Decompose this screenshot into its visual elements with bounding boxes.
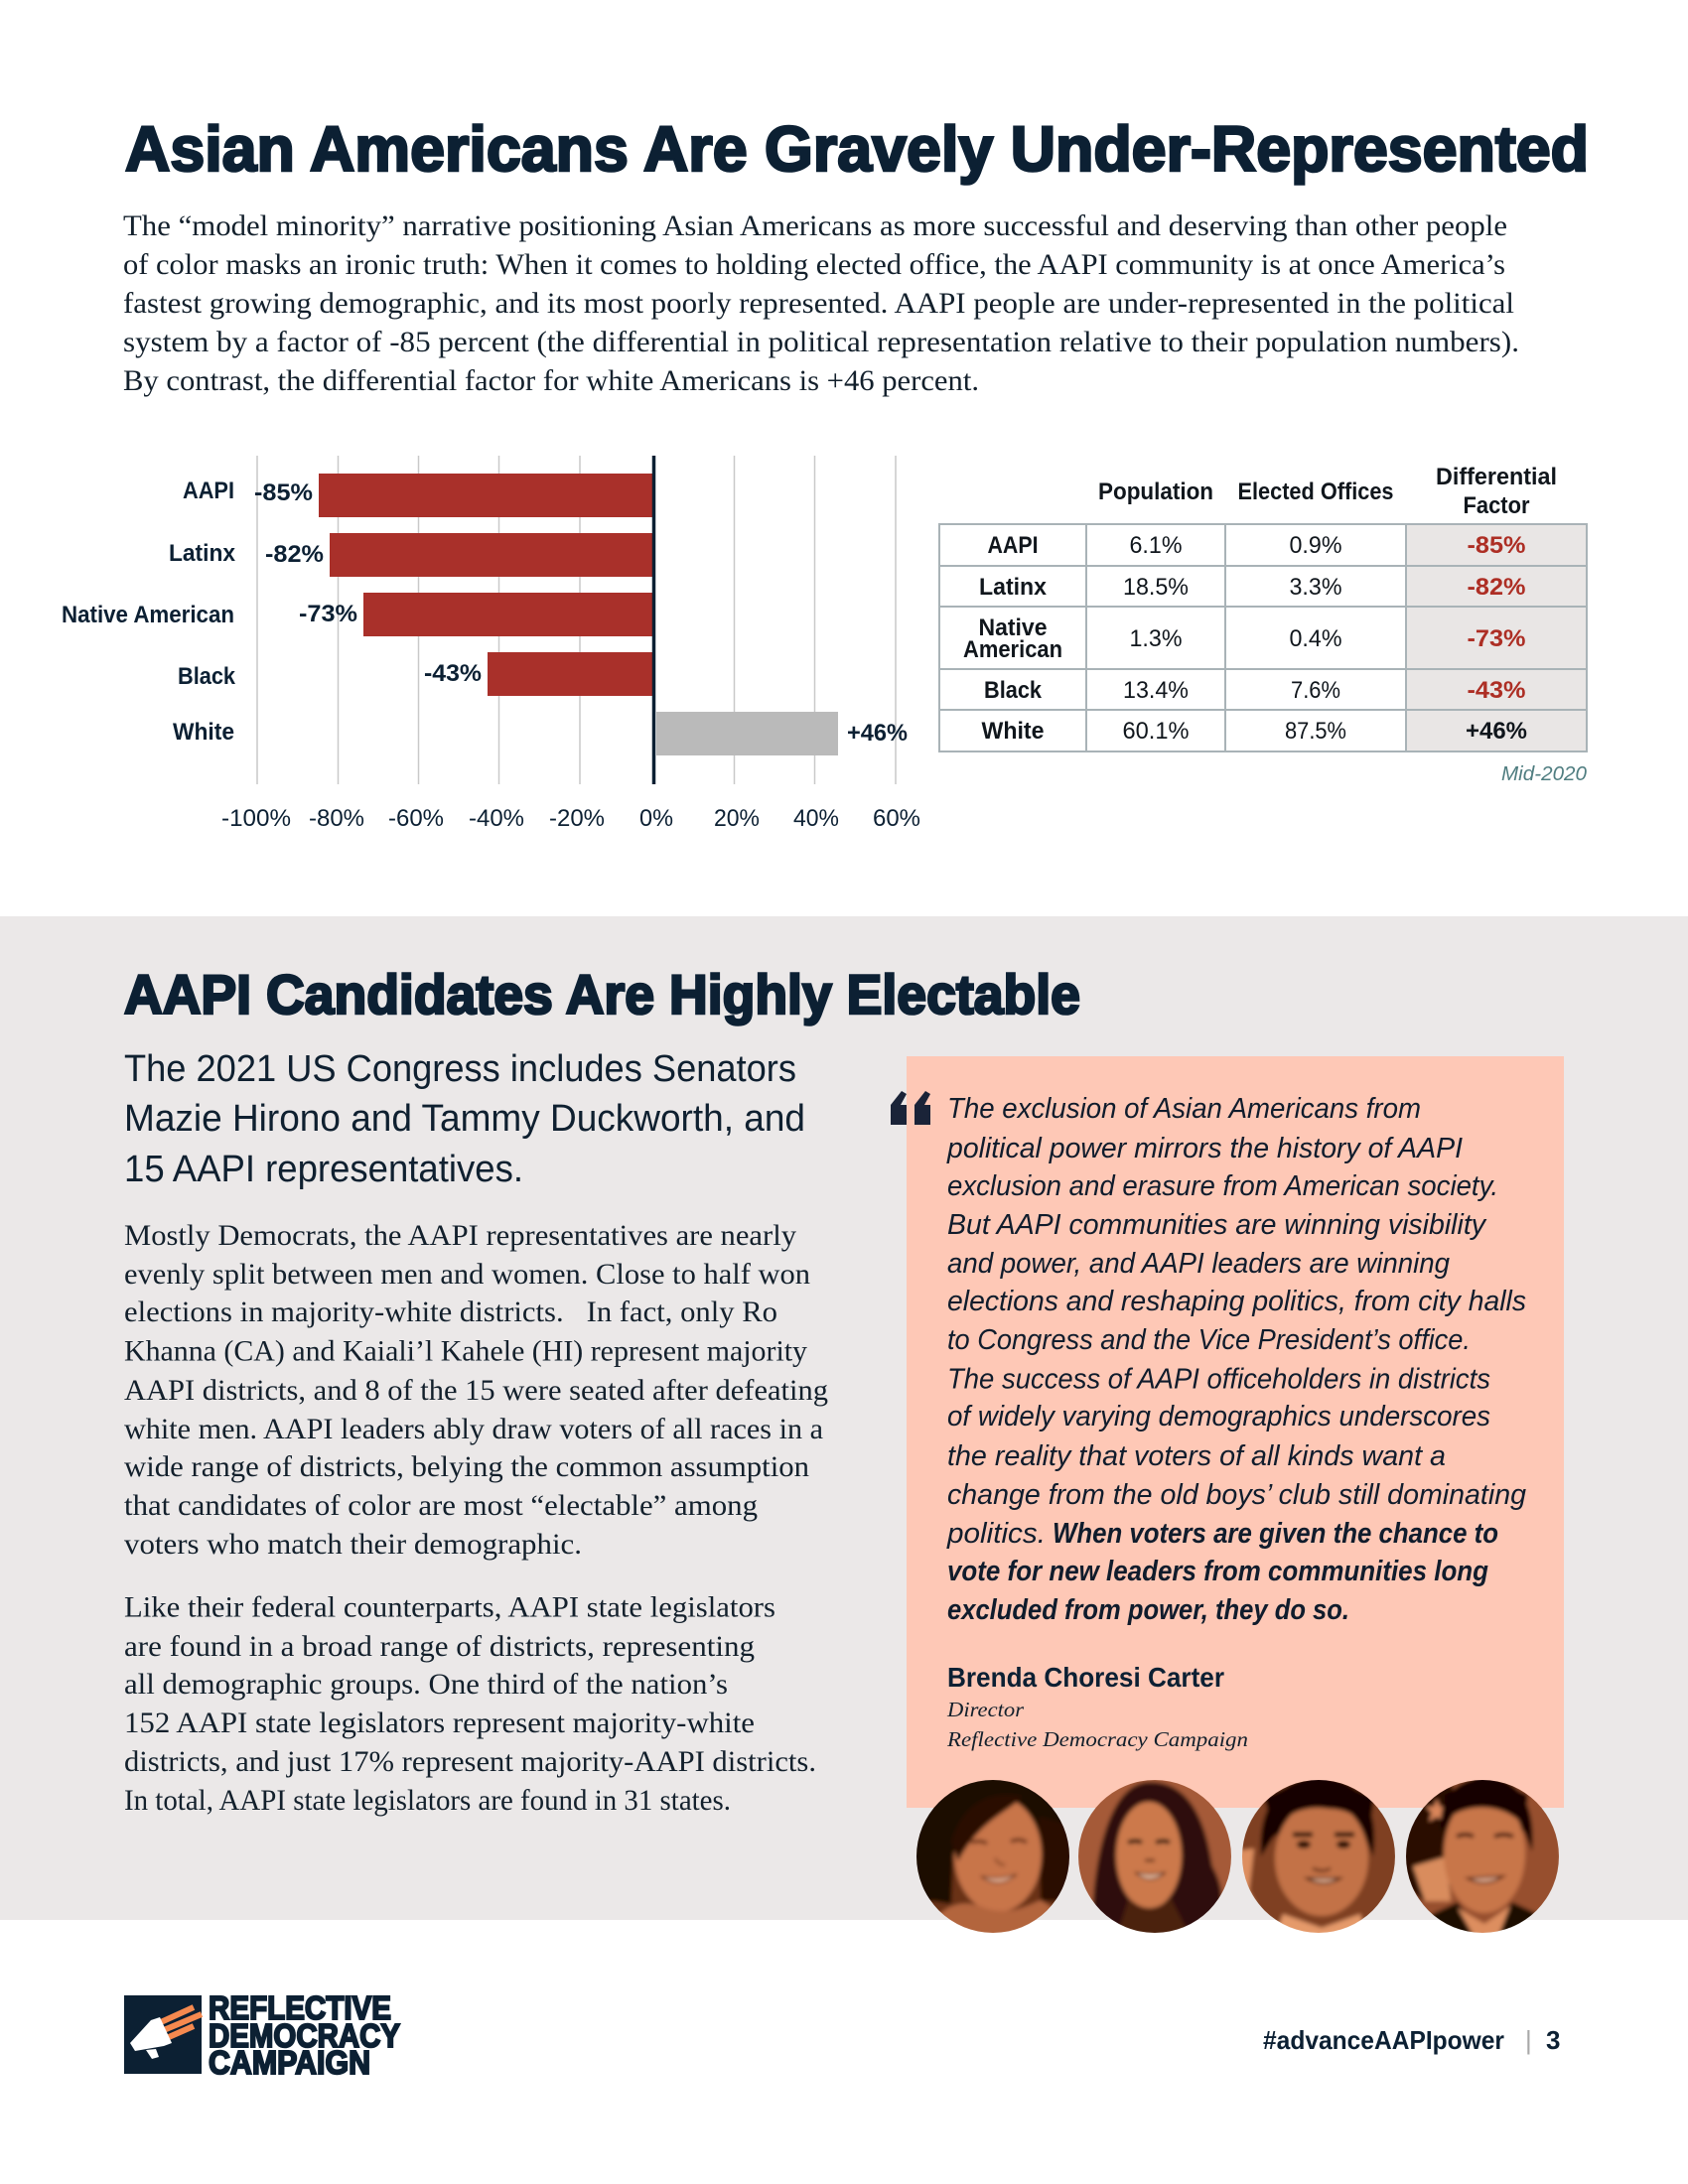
quote text: of widely varying demographics underscores	[947, 1401, 1490, 1433]
data table: 7.6%	[1291, 677, 1340, 704]
quote text: But AAPI communities are winning visibility	[947, 1209, 1486, 1241]
data table: Differential	[1436, 464, 1557, 490]
quote text: political power mirrors the history of AAPI	[946, 1133, 1463, 1164]
data table: American	[963, 636, 1062, 663]
data table: -85%	[1468, 532, 1525, 559]
portrait: Tammy Duckworth	[1078, 1780, 1231, 1933]
table date note: Mid-2020	[1501, 763, 1587, 785]
bar chart: representation differential: -100%	[221, 805, 291, 832]
data table: Factor	[1464, 492, 1529, 519]
body text: representatives: evenly split between men and women. Close to half won	[124, 1258, 810, 1291]
data table: 18.5%	[1123, 574, 1189, 601]
body text: representatives: wide range of districts, belying the common assumption	[124, 1450, 809, 1483]
body text: representatives: Mostly Democrats, the AAPI representatives are nearly	[124, 1219, 796, 1252]
body text: state legislators	[124, 1590, 816, 1817]
data table: -82%	[1468, 574, 1525, 601]
bar chart: representation differential: 60%	[873, 805, 920, 832]
body text: representatives: white men. AAPI leaders ably draw voters of all races in a	[124, 1413, 823, 1445]
bar chart: representation differential: -85%	[254, 479, 313, 506]
portrait: Mazie Hirono	[916, 1780, 1069, 1933]
quote text: exclusion and erasure from American society.	[947, 1170, 1498, 1202]
footer hashtag and page number: |	[1525, 2025, 1532, 2055]
icon: megaphone	[124, 1995, 202, 2074]
quote text	[946, 1093, 1526, 1626]
data table: 0.9%	[1289, 532, 1342, 559]
intro text block: By contrast, the differential factor for white Americans is +46 percent.	[123, 364, 979, 397]
body text: state legislators: districts, and just 17% represent majority-AAPI districts.	[124, 1745, 816, 1778]
bar chart: representation differential: Black	[178, 663, 236, 690]
logo: Reflective Democracy Campaign	[124, 1989, 400, 2081]
bar chart: representation differential: White	[173, 719, 234, 746]
subheading: The 2021 US Congress includes Senators	[124, 1048, 796, 1090]
subheading: Mazie Hirono and Tammy Duckworth, and	[124, 1098, 805, 1140]
data table: -43%	[1468, 677, 1525, 704]
intro text block	[123, 209, 1519, 397]
quote text: vote for new leaders from communities long	[947, 1556, 1488, 1587]
data table: 0.4%	[1289, 625, 1342, 652]
data table: 87.5%	[1285, 718, 1346, 745]
footer hashtag and page number: #advanceAAPIpower	[1263, 2025, 1504, 2055]
subheading: 15 AAPI representatives.	[124, 1149, 523, 1190]
bar chart: representation differential: -82%	[265, 541, 324, 568]
intro text block: system by a factor of -85 percent (the differential in political representation relative to their population numbers).	[123, 326, 1519, 358]
quote text: politics.	[946, 1518, 1046, 1550]
body text: state legislators: 152 AAPI state legislators represent majority-white	[124, 1706, 755, 1739]
panel: pull quote	[891, 1056, 1564, 1808]
quote text: elections and reshaping politics, from city halls	[947, 1286, 1526, 1317]
data table: Elected Offices	[1237, 478, 1394, 505]
bar chart: representation differential: 0%	[639, 805, 673, 832]
data table: Black	[984, 677, 1043, 704]
body text: state legislators: Like their federal counterparts, AAPI state legislators	[124, 1590, 775, 1624]
data table: +46%	[1466, 718, 1527, 745]
attribution: Reflective Democracy Campaign	[946, 1727, 1248, 1751]
data table: 60.1%	[1122, 718, 1190, 745]
data table: 6.1%	[1130, 532, 1182, 559]
bar chart: representation differential	[62, 456, 920, 832]
attribution: Brenda Choresi Carter	[947, 1662, 1224, 1693]
bar chart: representation differential: -60%	[388, 805, 444, 832]
logo: Reflective Democracy Campaign: DEMOCRACY	[209, 2017, 400, 2054]
data table: Native	[979, 614, 1047, 641]
footer hashtag and page number: 3	[1546, 2025, 1560, 2055]
quote text: and power, and AAPI leaders are winning	[947, 1248, 1450, 1280]
bar chart: representation differential: -20%	[549, 805, 605, 832]
bar chart: representation differential: -43%	[424, 660, 482, 687]
data table: 1.3%	[1130, 625, 1182, 652]
body text: representatives: that candidates of color are most “electable” among	[124, 1489, 758, 1522]
quote text: When voters are given the chance to	[1053, 1518, 1498, 1550]
bar chart: representation differential: -40%	[469, 805, 524, 832]
bar chart: representation differential: Native American	[62, 602, 234, 628]
data table	[939, 464, 1587, 751]
bar chart: representation differential: -80%	[309, 805, 364, 832]
bar chart: representation differential: -73%	[299, 601, 357, 627]
data table: 3.3%	[1289, 574, 1342, 601]
quote text: change from the old boys’ club still dominating	[947, 1479, 1526, 1511]
data table: 13.4%	[1123, 677, 1189, 704]
data table: AAPI	[987, 532, 1039, 559]
body text: state legislators: are found in a broad range of districts, representing	[124, 1630, 755, 1663]
bar chart: representation differential: AAPI	[183, 478, 234, 504]
portrait: Ro Khanna	[1242, 1780, 1395, 1933]
body text: representatives: elections in majority-white districts. In fact, only Ro	[124, 1296, 777, 1328]
quote text: The exclusion of Asian Americans from	[947, 1093, 1421, 1125]
quote text: the reality that voters of all kinds want a	[947, 1440, 1446, 1472]
section heading: AAPI Candidates Are Highly Electable	[124, 963, 1080, 1025]
quote text: excluded from power, they do so.	[947, 1594, 1349, 1626]
data table: Population	[1098, 478, 1213, 505]
body text: state legislators: In total, AAPI state legislators are found in 31 states.	[124, 1784, 731, 1817]
title: Asian Americans Are Gravely Under-Represented	[125, 113, 1589, 185]
quote text: to Congress and the Vice President’s office.	[947, 1324, 1471, 1356]
intro text block: fastest growing demographic, and its most poorly represented. AAPI people are under-represented in the political	[123, 287, 1514, 320]
logo: Reflective Democracy Campaign: CAMPAIGN	[209, 2044, 370, 2081]
intro text block: The “model minority” narrative positioning Asian Americans as more successful and deserving than other people	[123, 209, 1507, 242]
bar chart: representation differential: Latinx	[169, 540, 236, 567]
bar chart: representation differential: 20%	[714, 805, 760, 832]
portrait: Kaiali'i Kahele	[1406, 1780, 1559, 1933]
subheading	[124, 1048, 805, 1190]
body text: representatives: Khanna (CA) and Kaiali’l Kahele (HI) represent majority	[124, 1334, 807, 1368]
quote text: The success of AAPI officeholders in districts	[947, 1364, 1490, 1396]
data table: White	[981, 718, 1045, 745]
intro text block: of color masks an ironic truth: When it comes to holding elected office, the AAPI community is at once America’s	[123, 248, 1505, 281]
body text: representatives: AAPI districts, and 8 of the 15 were seated after defeating	[124, 1374, 828, 1407]
data table: Latinx	[979, 574, 1048, 601]
body text: representatives: voters who match their demographic.	[124, 1528, 582, 1561]
attribution	[946, 1662, 1248, 1751]
bar chart: representation differential: +46%	[847, 720, 908, 747]
logo: Reflective Democracy Campaign: REFLECTIVE	[209, 1989, 391, 2026]
body text: representatives	[124, 1219, 828, 1561]
panel: electable section background	[0, 916, 1688, 1920]
bar chart: representation differential: 40%	[793, 805, 839, 832]
data table: -73%	[1468, 625, 1525, 652]
attribution: Director	[946, 1698, 1025, 1721]
icon: quotation marks	[891, 1091, 930, 1125]
body text: state legislators: all demographic groups. One third of the nation’s	[124, 1668, 728, 1701]
